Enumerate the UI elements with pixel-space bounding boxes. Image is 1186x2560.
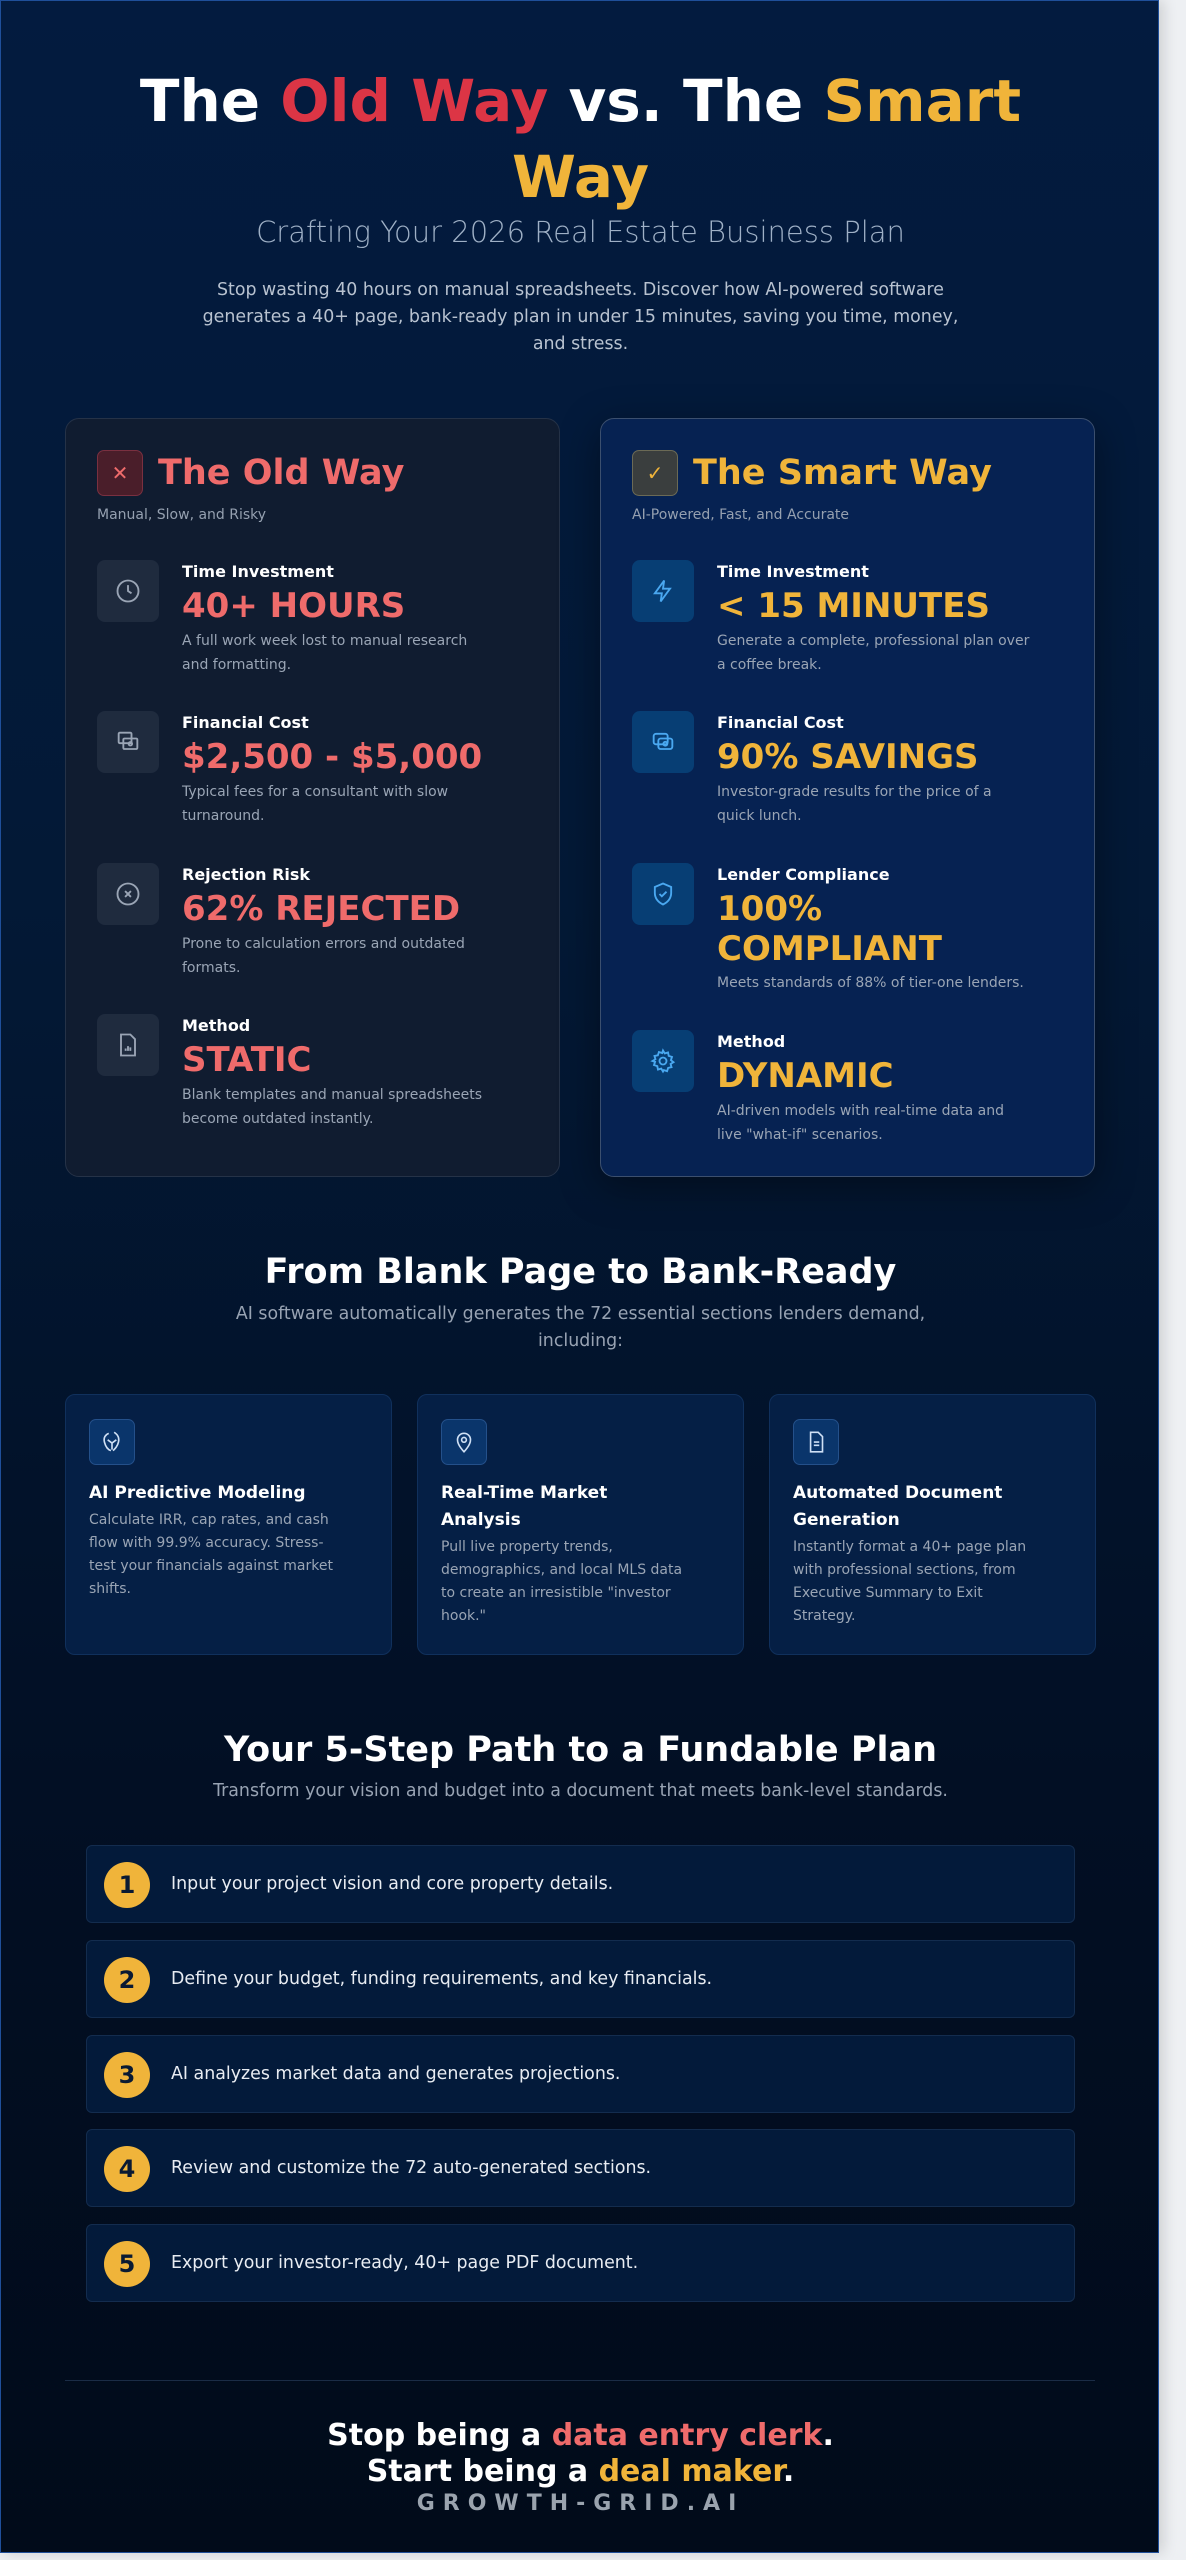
step 4: 4 <box>119 2155 135 2183</box>
icon: clock <box>97 560 159 622</box>
section subtitle: including: <box>538 1331 623 1351</box>
feature card: document generation: Instantly format a 40+ page plan <box>793 1539 1026 1555</box>
subheading: AI-Powered, Fast, and Accurate <box>632 507 849 523</box>
feature card: market analysis: Real-Time Market <box>441 1483 607 1503</box>
icon: brain <box>89 1419 135 1465</box>
icon: x <box>97 450 143 496</box>
icon: circle x <box>97 863 159 925</box>
panel: old way: formats. <box>182 960 240 976</box>
panel: smart way: Method <box>717 1032 785 1051</box>
feature card: market analysis: Pull live property trends, <box>441 1539 613 1555</box>
panel: smart way: COMPLIANT <box>717 929 942 969</box>
feature card: market analysis: Analysis <box>441 1510 521 1530</box>
step 4 <box>86 2129 1075 2207</box>
feature card: document generation: Executive Summary to Exit <box>793 1585 983 1601</box>
heading: smart way: The Smart Way <box>693 453 992 493</box>
panel: old way: Typical fees for a consultant with slow <box>182 784 448 800</box>
feature card: market analysis: demographics, and local MLS data <box>441 1562 682 1578</box>
item: time <box>632 560 1030 673</box>
intro paragraph <box>203 280 958 354</box>
panel: old way: Prone to calculation errors and outdated <box>182 936 465 952</box>
section subtitle <box>236 1304 925 1351</box>
icon: check: ✓ <box>647 461 663 485</box>
panel: old way <box>65 418 560 1177</box>
step 3: AI analyzes market data and generates projections. <box>171 2064 620 2084</box>
panel: smart way: Generate a complete, professional plan over <box>717 633 1029 649</box>
panel: old way: become outdated instantly. <box>182 1111 373 1127</box>
heading: old way: The Old Way <box>158 453 404 493</box>
panel: smart way: quick lunch. <box>717 808 802 824</box>
panel: old way: and formatting. <box>182 657 291 673</box>
subheading: Manual, Slow, and Risky <box>97 507 266 523</box>
step 4: Review and customize the 72 auto-generated sections. <box>171 2158 651 2178</box>
panel: smart way: < 15 MINUTES <box>717 586 990 626</box>
item: time <box>97 560 467 673</box>
icon: bolt <box>632 560 694 622</box>
step 2: Define your budget, funding requirements, and key financials. <box>171 1969 712 1989</box>
feature card: market analysis: hook." <box>441 1608 486 1624</box>
panel: old way: Method <box>182 1016 250 1035</box>
title <box>140 67 1021 211</box>
panel: smart way: Investor-grade results for the price of a <box>717 784 992 800</box>
feature card: document generation: Automated Document <box>793 1483 1002 1503</box>
feature card: market analysis <box>417 1394 744 1655</box>
icon: bills <box>97 711 159 773</box>
panel: smart way: Lender Compliance <box>717 865 890 884</box>
feature card: document generation <box>769 1394 1096 1655</box>
panel: smart way: DYNAMIC <box>717 1056 894 1096</box>
intro paragraph: generates a 40+ page, bank-ready plan in under 15 minutes, saving you time, money, <box>203 307 958 327</box>
step 1 <box>86 1845 1075 1923</box>
subtitle: Crafting Your 2026 Real Estate Business Plan <box>256 215 905 249</box>
icon: file chart <box>97 1014 159 1076</box>
footer tagline: Start being a deal maker. <box>367 2454 794 2489</box>
icon: shield <box>632 863 694 925</box>
panel: old way: Time Investment <box>182 562 334 581</box>
item: cost <box>97 711 482 824</box>
feature card: predictive modeling: AI Predictive Modeling <box>89 1483 306 1503</box>
panel: old way: Blank templates and manual spreadsheets <box>182 1087 482 1103</box>
feature card: predictive modeling: shifts. <box>89 1581 131 1597</box>
icon: money <box>632 711 694 773</box>
feature card: document generation: Strategy. <box>793 1608 855 1624</box>
step 2 <box>86 1940 1075 2018</box>
title: Way <box>512 143 649 211</box>
panel: smart way: Meets standards of 88% of tier-one lenders. <box>717 975 1024 991</box>
panel: smart way: live "what-if" scenarios. <box>717 1127 883 1143</box>
item: cost <box>632 711 992 824</box>
panel: smart way <box>600 418 1095 1177</box>
step 3 <box>86 2035 1075 2113</box>
panel: old way: Rejection Risk <box>182 865 310 884</box>
icon: document <box>793 1419 839 1465</box>
panel: old way: 40+ HOURS <box>182 586 405 626</box>
step 2: 2 <box>119 1966 135 1994</box>
step 5: Export your investor-ready, 40+ page PDF document. <box>171 2253 638 2273</box>
icon: check <box>632 450 678 496</box>
panel: smart way: 100% <box>717 889 822 929</box>
icon: pin <box>441 1419 487 1465</box>
steps subtitle: Transform your vision and budget into a document that meets bank-level standards. <box>213 1781 948 1801</box>
footer tagline <box>327 2418 834 2489</box>
step 3: 3 <box>119 2061 135 2089</box>
brand: GROWTH-GRID.AI <box>417 2491 744 2516</box>
section subtitle: AI software automatically generates the 72 essential sections lenders demand, <box>236 1304 925 1324</box>
footer tagline: Stop being a data entry clerk. <box>327 2418 834 2453</box>
step 1: Input your project vision and core property details. <box>171 1874 613 1894</box>
panel: old way: 62% REJECTED <box>182 889 460 929</box>
feature card: predictive modeling: flow with 99.9% accuracy. Stress- <box>89 1535 324 1551</box>
feature card: predictive modeling <box>65 1394 392 1655</box>
feature card: predictive modeling: test your financials against market <box>89 1558 333 1574</box>
heading: 5-step path: Your 5-Step Path to a Fundable Plan <box>224 1730 937 1770</box>
title: The Old Way vs. The Smart <box>140 67 1021 135</box>
panel: old way: Financial Cost <box>182 713 309 732</box>
item: method <box>632 1030 1004 1143</box>
heading: blank page to bank-ready: From Blank Page to Bank-Ready <box>265 1252 896 1292</box>
panel: smart way: Time Investment <box>717 562 869 581</box>
panel: smart way: AI-driven models with real-time data and <box>717 1103 1004 1119</box>
item: rejection <box>97 863 465 976</box>
feature card: predictive modeling: Calculate IRR, cap rates, and cash <box>89 1512 329 1528</box>
panel: old way: A full work week lost to manual research <box>182 633 467 649</box>
feature card: document generation: Generation <box>793 1510 900 1530</box>
panel: old way: $2,500 - $5,000 <box>182 737 482 777</box>
panel: old way: turnaround. <box>182 808 264 824</box>
item: compliance <box>632 863 1024 991</box>
step 5: 5 <box>119 2250 135 2278</box>
step 1: 1 <box>119 1871 135 1899</box>
icon: gear <box>632 1030 694 1092</box>
intro paragraph: Stop wasting 40 hours on manual spreadsheets. Discover how AI-powered software <box>217 280 944 300</box>
panel: smart way: a coffee break. <box>717 657 822 673</box>
step 5 <box>86 2224 1075 2302</box>
item: method <box>97 1014 482 1127</box>
panel: old way: STATIC <box>182 1040 312 1080</box>
icon: x: ✕ <box>112 461 128 485</box>
panel: smart way: Financial Cost <box>717 713 844 732</box>
feature card: document generation: with professional sections, from <box>793 1562 1016 1578</box>
feature card: market analysis: to create an irresistible "investor <box>441 1585 671 1601</box>
panel: smart way: 90% SAVINGS <box>717 737 979 777</box>
intro paragraph: and stress. <box>533 334 628 354</box>
